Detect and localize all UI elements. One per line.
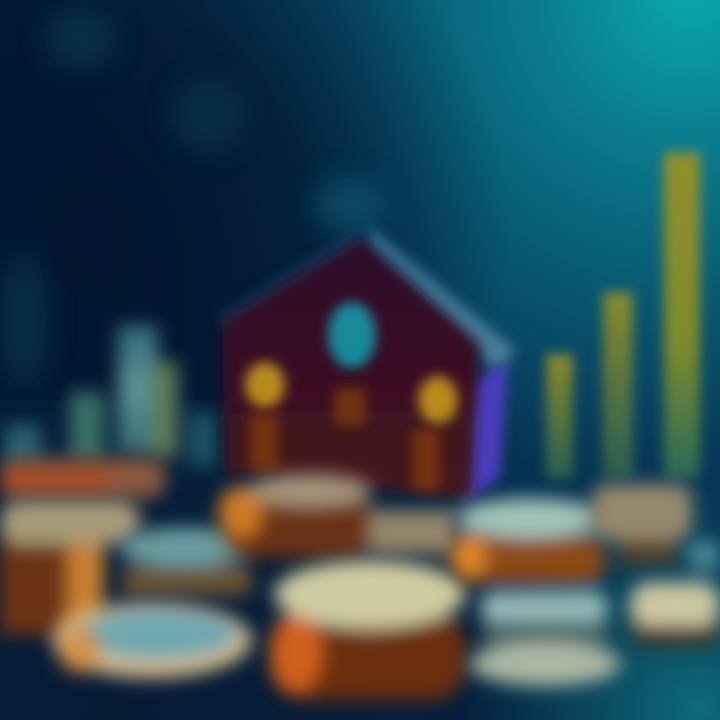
middle left coins (119, 527, 252, 595)
house (218, 226, 516, 502)
house roof edge (365, 226, 516, 372)
centre door (334, 388, 366, 426)
left window (245, 362, 285, 408)
left background bars (5, 325, 216, 467)
house side wall (462, 360, 508, 502)
far-right tan coin (592, 484, 692, 564)
right window (418, 376, 458, 424)
house body (222, 238, 480, 498)
left column (250, 414, 278, 470)
front centre coin (270, 560, 466, 700)
centre back coin (218, 474, 455, 557)
far-right flat coin (630, 540, 720, 645)
right gold bars (546, 152, 700, 479)
coins (0, 458, 720, 700)
house left roof glow (218, 228, 362, 336)
round window (328, 302, 376, 368)
left coin stack (0, 500, 140, 640)
right coin stack (450, 498, 621, 686)
right column (412, 430, 440, 490)
far-left coin stack (0, 458, 165, 498)
front-left flat coin (52, 602, 252, 678)
